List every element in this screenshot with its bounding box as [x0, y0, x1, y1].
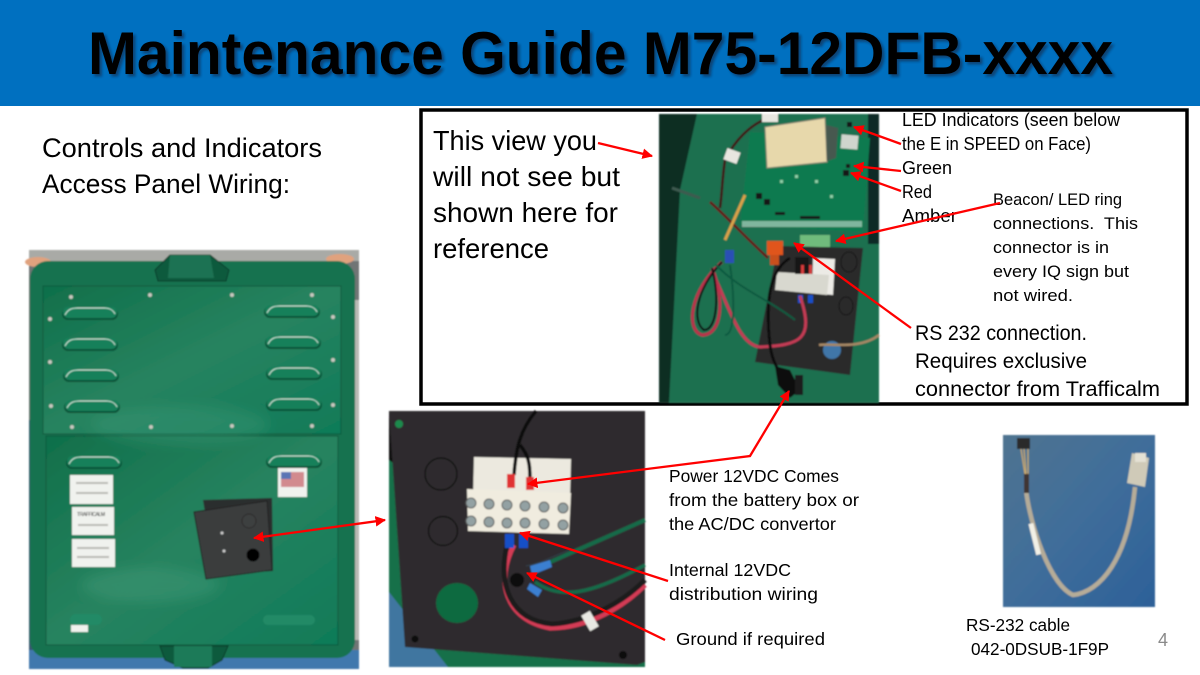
text: LED indicators: Red: [902, 182, 932, 202]
arrow: power input: [528, 391, 789, 484]
text: RS 232 connection: RS 232 connection.: [915, 322, 1087, 345]
photo: sign back panel: [25, 250, 359, 669]
arrow: RS 232 connector: [794, 243, 911, 328]
stickers: [70, 468, 307, 632]
text: beacon connections: connections. This: [993, 214, 1138, 233]
text: LED indicators: Amber: [902, 206, 957, 226]
text: cable caption: [966, 615, 1109, 659]
photo: RS-232 cable: [1003, 435, 1155, 607]
photo: inside of sign: [659, 114, 879, 403]
text: view note: This view you: [433, 125, 597, 156]
label card: [473, 457, 571, 500]
arrow: LED indicators: [854, 127, 901, 144]
orange connector: [767, 241, 783, 255]
text: LED indicators: [902, 110, 1121, 226]
text: LED indicators: Green: [902, 158, 952, 178]
arrow: panel to close-up: [254, 520, 385, 538]
text: view note: will not see but: [432, 161, 620, 192]
text: beacon connections: connector is in: [993, 238, 1109, 257]
page number: 4: [1158, 630, 1168, 650]
circuit board: [740, 132, 870, 232]
knockouts: [425, 458, 457, 490]
heading: controls and indicators: Access Panel Wiring:: [42, 169, 290, 199]
cable: [1026, 487, 1135, 595]
text: view note: reference: [433, 233, 549, 264]
text: LED indicators: the E in SPEED on Face): [902, 134, 1091, 154]
text: power note: from the battery box or: [669, 490, 859, 510]
arrow: internal wiring: [520, 533, 668, 581]
power jack: [775, 366, 800, 398]
text: view note: [432, 125, 620, 264]
heading: controls and indicators: [42, 133, 322, 199]
arrow: view note to photo: [598, 143, 652, 156]
reference view panel: [421, 110, 1187, 404]
text: power note: [669, 466, 859, 534]
text: power note: Power 12VDC Comes: [669, 466, 839, 486]
text: ground note: Ground if required: [676, 629, 825, 649]
terminal block: [812, 258, 835, 295]
text: cable caption: 042-0DSUB-1F9P: [971, 639, 1109, 659]
radar module: [765, 118, 827, 168]
text: internal wiring note: distribution wiring: [669, 584, 818, 604]
arrow: beacon connector: [836, 203, 1000, 241]
text: internal wiring note: Internal 12VDC: [669, 560, 791, 580]
wires: [692, 118, 879, 385]
text: power note: the AC/DC convertor: [669, 514, 836, 534]
text: internal wiring note: [669, 560, 818, 604]
text: RS 232 connection: Requires exclusive: [915, 350, 1087, 373]
text: cable caption: RS-232 cable: [966, 615, 1070, 635]
title banner: [0, 0, 1200, 106]
text: beacon connections: not wired.: [993, 286, 1073, 305]
photo: access panel wiring close-up: [389, 411, 645, 667]
text: RS 232 connection: connector from Trafficalm: [915, 378, 1160, 401]
red arrows: [254, 127, 1000, 640]
access plate: [203, 498, 273, 574]
terminal block: [467, 489, 571, 534]
text: beacon connections: [993, 190, 1138, 305]
rivets: [48, 293, 335, 429]
arrow: ground: [527, 573, 665, 640]
text: beacon connections: Beacon/ LED ring: [993, 190, 1122, 209]
text: RS 232 connection: [915, 322, 1160, 401]
arrow: green LED: [854, 166, 901, 171]
photo: sign back panel: TRAFFICALM: [77, 512, 105, 518]
text: beacon connections: every IQ sign but: [993, 262, 1129, 281]
heading: controls and indicators: Controls and Indicators: [42, 133, 322, 163]
text: LED indicators: LED Indicators (seen below: [902, 110, 1121, 130]
text: view note: shown here for: [433, 197, 618, 228]
top and bottom brackets: [155, 255, 229, 281]
title: Maintenance Guide M75-12DFB-xxxx: [88, 20, 1113, 87]
arrow: red LED: [851, 173, 901, 191]
access plate: [755, 246, 863, 375]
incoming power wires: [514, 411, 536, 475]
distribution wiring: [505, 545, 645, 628]
vent louvers: [62, 305, 322, 625]
